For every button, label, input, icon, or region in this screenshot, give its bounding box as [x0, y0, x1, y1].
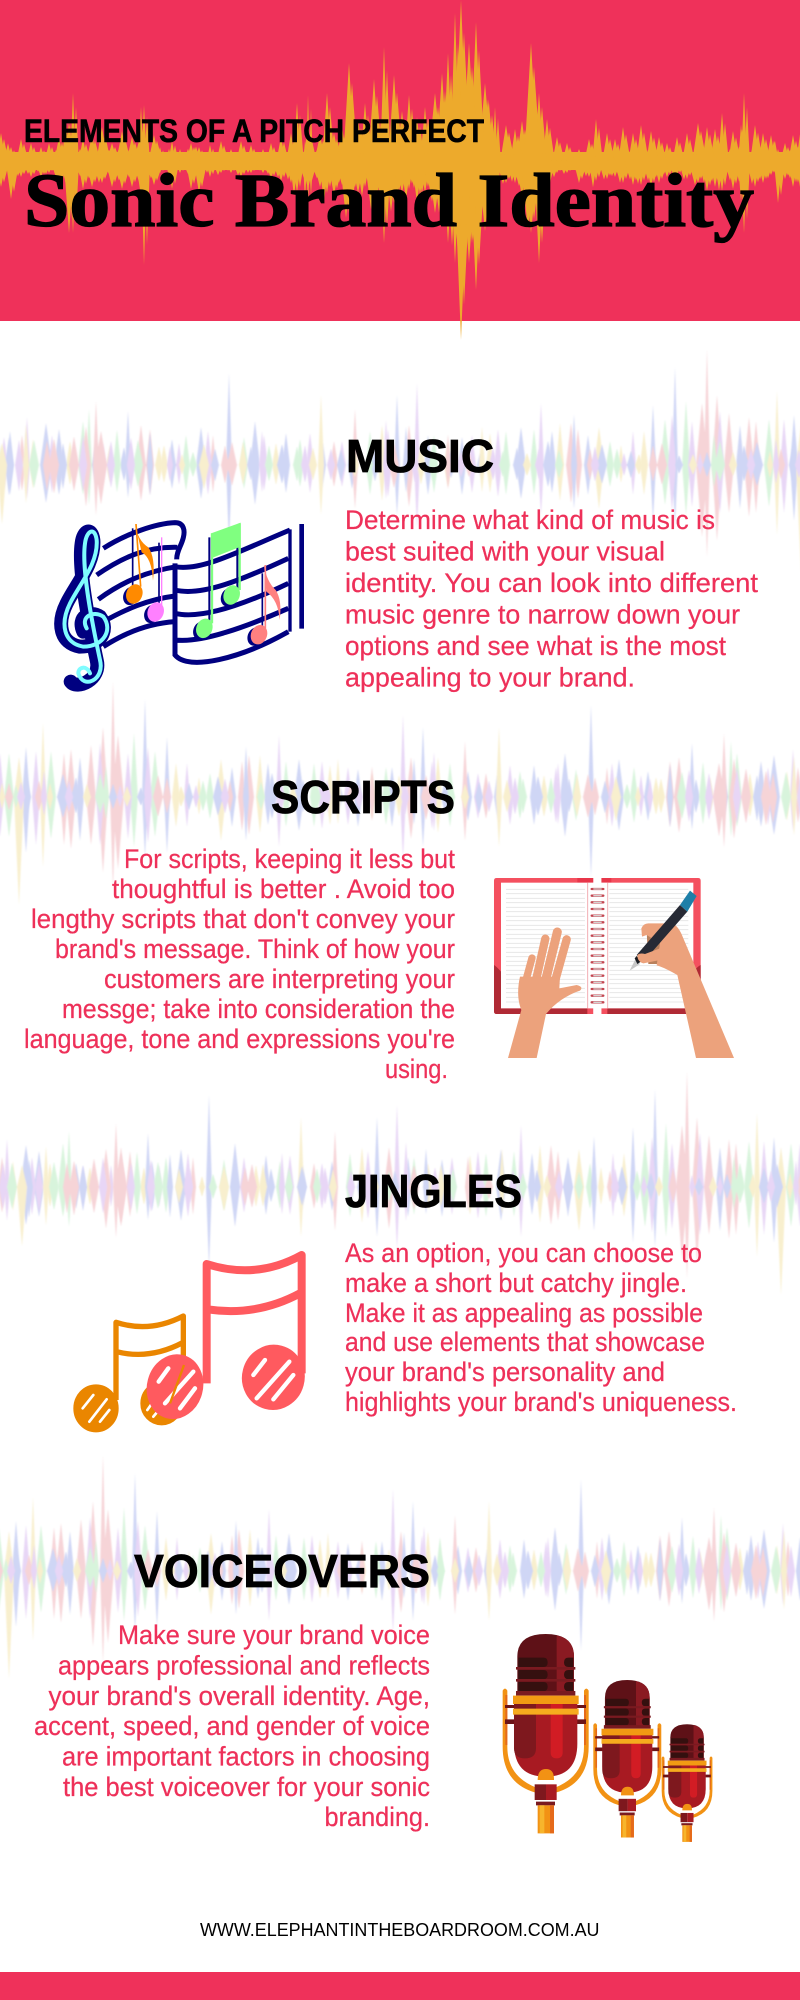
text block: voiceovers: the best voiceover for your sonic: [63, 1772, 430, 1802]
text block: music: Determine what kind of music is: [345, 505, 715, 535]
text block: scripts: lengthy scripts that don't convey your: [31, 904, 455, 934]
text block: jingles: Make it as appealing as possible: [345, 1298, 703, 1328]
text block: scripts: messge; take into consideration the: [62, 994, 455, 1024]
text block: scripts: customers are interpreting your: [104, 964, 455, 994]
header banner: [0, 0, 800, 340]
text block: jingles: As an option, you can choose to: [345, 1238, 702, 1268]
main title: Sonic Brand Identity: [24, 159, 754, 243]
text block: scripts: using.: [385, 1054, 448, 1084]
header waveform: [0, 0, 800, 340]
text block: voiceovers: Make sure your brand voice: [118, 1620, 430, 1650]
footer url: WWW.ELEPHANTINTHEBOARDROOM.COM.AU: [200, 1919, 600, 1940]
text block: jingles: and use elements that showcase: [345, 1327, 705, 1357]
text block: voiceovers: appears professional and reflects: [58, 1650, 430, 1680]
text block: music: options and see what is the most: [345, 631, 726, 661]
text block: scripts: thoughtful is better . Avoid too: [112, 874, 455, 904]
icon: three microphones: [503, 1634, 712, 1842]
text block: voiceovers: accent, speed, and gender of voice: [34, 1711, 430, 1741]
text block: voiceovers: are important factors in choosing: [62, 1742, 430, 1772]
text block: music: appealing to your brand.: [345, 662, 635, 692]
text block: scripts: brand's message. Think of how your: [55, 934, 455, 964]
heading: music: MUSIC: [346, 430, 494, 482]
subtitle: ELEMENTS OF A PITCH PERFECT: [24, 113, 484, 149]
text block: music: identity. You can look into different: [345, 568, 759, 598]
icon: music staff with clef and notes: [61, 523, 302, 685]
text block: jingles: highlights your brand's uniqueness.: [345, 1387, 737, 1417]
text block: music: best suited with your visual: [345, 536, 665, 566]
heading: jingles: JINGLES: [345, 1165, 522, 1217]
text block: voiceovers: branding.: [324, 1802, 430, 1832]
text block: jingles: [345, 1238, 737, 1417]
text block: scripts: language, tone and expressions you're: [24, 1024, 455, 1054]
footer bar: [0, 1972, 800, 2000]
panel: scripts: [24, 771, 734, 1084]
text block: scripts: For scripts, keeping it less but: [124, 844, 455, 874]
text block: music: music genre to narrow down your: [345, 600, 740, 630]
text block: jingles: your brand's personality and: [345, 1357, 665, 1387]
text block: voiceovers: [34, 1620, 430, 1832]
panel: jingles: [76, 1165, 737, 1430]
heading: voiceovers: VOICEOVERS: [134, 1545, 430, 1597]
panel: voiceovers: [34, 1545, 712, 1842]
icon: notebook with hands and pen: [494, 878, 734, 1058]
text block: jingles: make a short but catchy jingle.: [345, 1268, 687, 1298]
icon: two coloured music notes: [76, 1255, 307, 1430]
heading: scripts: SCRIPTS: [271, 771, 455, 823]
text block: music: [345, 505, 759, 692]
panel: music: [61, 430, 759, 692]
text block: voiceovers: your brand's overall identity. Age,: [48, 1681, 430, 1711]
text block: scripts: [24, 844, 455, 1084]
